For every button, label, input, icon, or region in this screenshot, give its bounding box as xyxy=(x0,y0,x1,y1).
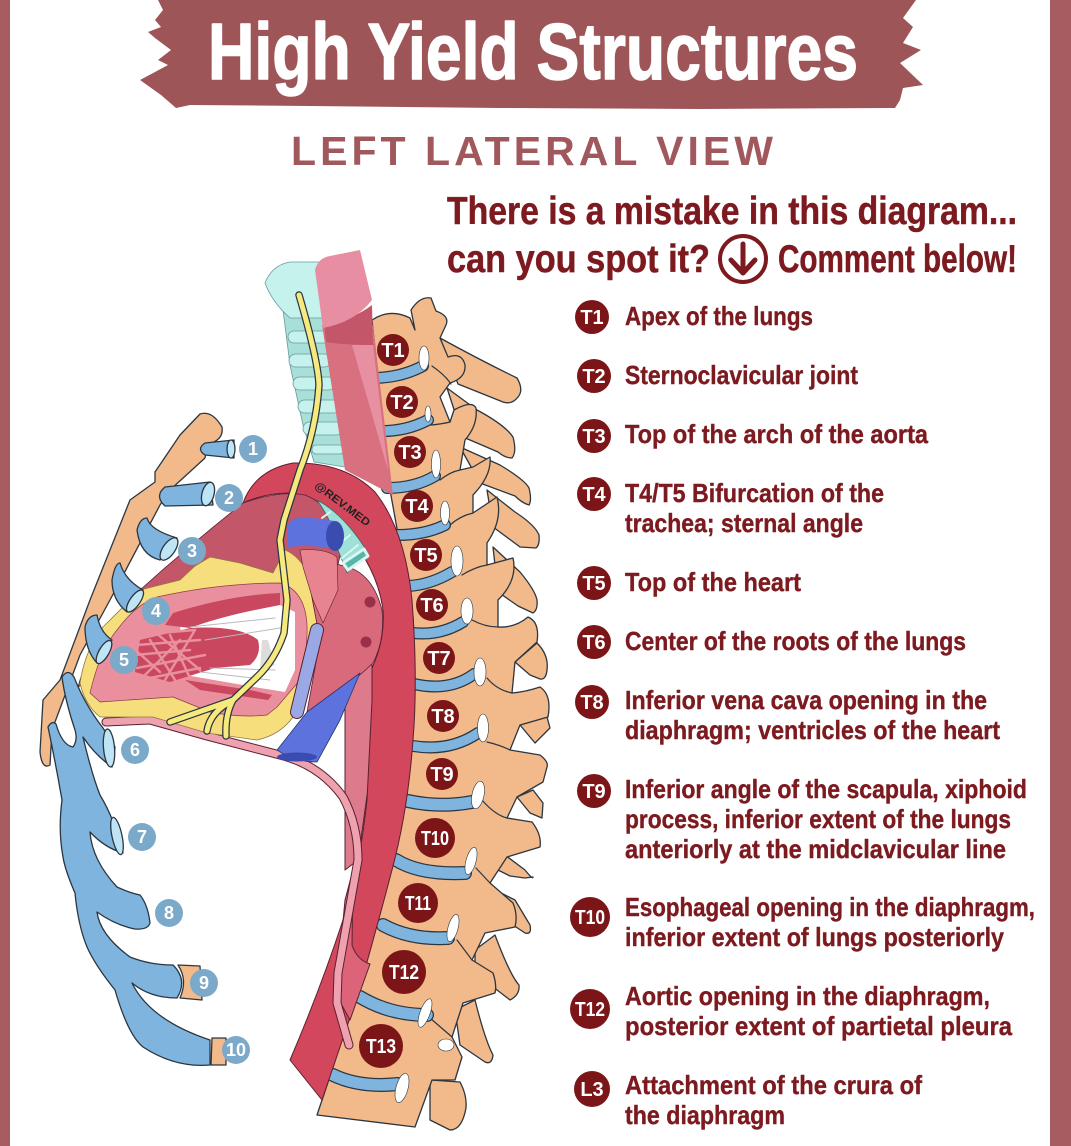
rib number markers: 9 xyxy=(199,973,209,993)
epicardial fat xyxy=(80,550,318,740)
legend list: Aortic opening in the diaphragm, xyxy=(625,981,990,1011)
legend list: T5 xyxy=(582,573,606,595)
legend list: diaphragm; ventricles of the heart xyxy=(625,715,1000,745)
legend list: T4/T5 Bifurcation of the xyxy=(625,478,884,508)
vertebra labels: T2 xyxy=(390,392,414,414)
pericardium upper xyxy=(78,494,345,687)
descending esophagus and aorta xyxy=(243,463,415,1100)
heart xyxy=(78,295,383,762)
legend list: the diaphragm xyxy=(625,1100,785,1130)
trachea xyxy=(265,262,345,467)
watermark: @REV.MED xyxy=(312,480,372,529)
legend list: L3 xyxy=(580,1079,604,1101)
rib number markers: 6 xyxy=(130,740,140,760)
right border xyxy=(1050,0,1071,1146)
legend list: posterior extent of partietal pleura xyxy=(625,1011,1012,1041)
prompt heading xyxy=(447,190,1017,282)
sternum xyxy=(40,413,222,766)
rib number markers: 4 xyxy=(151,601,161,621)
rib number markers: 3 xyxy=(187,541,197,561)
vertebra labels: T12 xyxy=(389,962,419,984)
legend list: T6 xyxy=(582,632,606,654)
legend list: T12 xyxy=(575,999,605,1021)
vertebra labels: T7 xyxy=(427,648,451,670)
legend list: Inferior angle of the scapula, xiphoid xyxy=(625,774,1027,804)
legend list: T10 xyxy=(575,907,605,929)
coronary sinus xyxy=(297,630,317,712)
vertebra labels: T3 xyxy=(398,442,422,464)
right heart xyxy=(303,550,383,712)
vertebra labels xyxy=(359,334,459,1068)
subtitle: LEFT LATERAL VIEW xyxy=(291,128,773,174)
legend list: Inferior vena cava opening in the xyxy=(625,685,987,715)
pulmonary vessel xyxy=(288,517,337,550)
anatomy diagram xyxy=(40,250,550,1130)
legend list: T1 xyxy=(580,307,604,329)
vertebra labels: T13 xyxy=(366,1036,396,1058)
rib number markers xyxy=(110,435,267,1064)
vertebral column xyxy=(317,298,549,1127)
vertebra labels: T8 xyxy=(431,706,455,728)
legend list: Top of the heart xyxy=(625,567,801,597)
legend list: Attachment of the crura of xyxy=(625,1070,922,1100)
rib number markers: 8 xyxy=(164,903,174,923)
vertebra labels: T6 xyxy=(420,595,444,617)
rib number markers: 7 xyxy=(137,827,147,847)
chamber xyxy=(180,605,295,692)
diaphragm xyxy=(106,720,358,1045)
legend list: T4 xyxy=(582,484,607,506)
rib number markers: 2 xyxy=(224,488,234,508)
atrial appendage xyxy=(300,550,338,623)
legend list: Apex of the lungs xyxy=(625,301,813,331)
vertebra arch lines xyxy=(430,366,512,1037)
vertebra labels: T11 xyxy=(405,893,431,915)
bronchus xyxy=(317,500,368,573)
lower rib cartilage xyxy=(48,672,210,1065)
legend list: T8 xyxy=(580,692,604,714)
left border xyxy=(0,0,10,1146)
prompt heading: can you spot it? xyxy=(447,238,710,281)
intervertebral foramina xyxy=(392,346,488,1104)
rib number markers: 1 xyxy=(248,439,258,459)
phrenic nerve xyxy=(170,295,319,736)
legend list: process, inferior extent of the lungs xyxy=(625,804,1011,834)
legend list: Sternoclavicular joint xyxy=(625,360,858,390)
inferior vena cava xyxy=(277,673,360,762)
vertebra labels: T5 xyxy=(414,545,438,567)
legend list: Center of the roots of the lungs xyxy=(625,626,966,656)
title banner xyxy=(140,0,923,109)
legend list: Top of the arch of the aorta xyxy=(625,419,928,449)
coronary dots xyxy=(364,596,376,608)
trabeculae xyxy=(130,630,205,680)
spinous processes xyxy=(430,338,550,1130)
legend list: T2 xyxy=(582,366,606,388)
legend list: anteriorly at the midclavicular line xyxy=(625,834,1006,864)
legend list: T9 xyxy=(582,781,606,803)
title: High Yield Structures xyxy=(208,7,858,96)
costal cartilages xyxy=(48,440,235,1065)
vertebra labels: T1 xyxy=(381,340,405,362)
legend list: trachea; sternal angle xyxy=(625,508,863,538)
vertebra labels: T10 xyxy=(421,828,449,850)
intervertebral discs xyxy=(333,366,478,1085)
legend list: inferior extent of lungs posteriorly xyxy=(625,922,1004,952)
vertebra labels: T9 xyxy=(430,764,454,786)
legend list xyxy=(570,300,1035,1130)
legend list: T3 xyxy=(582,426,606,448)
vertebra labels: T4 xyxy=(405,496,430,518)
icon: down arrow xyxy=(720,236,766,282)
rib number markers: 5 xyxy=(119,650,129,670)
myocardium xyxy=(90,583,307,716)
esophagus xyxy=(315,250,393,495)
rib number markers: 10 xyxy=(226,1040,246,1060)
